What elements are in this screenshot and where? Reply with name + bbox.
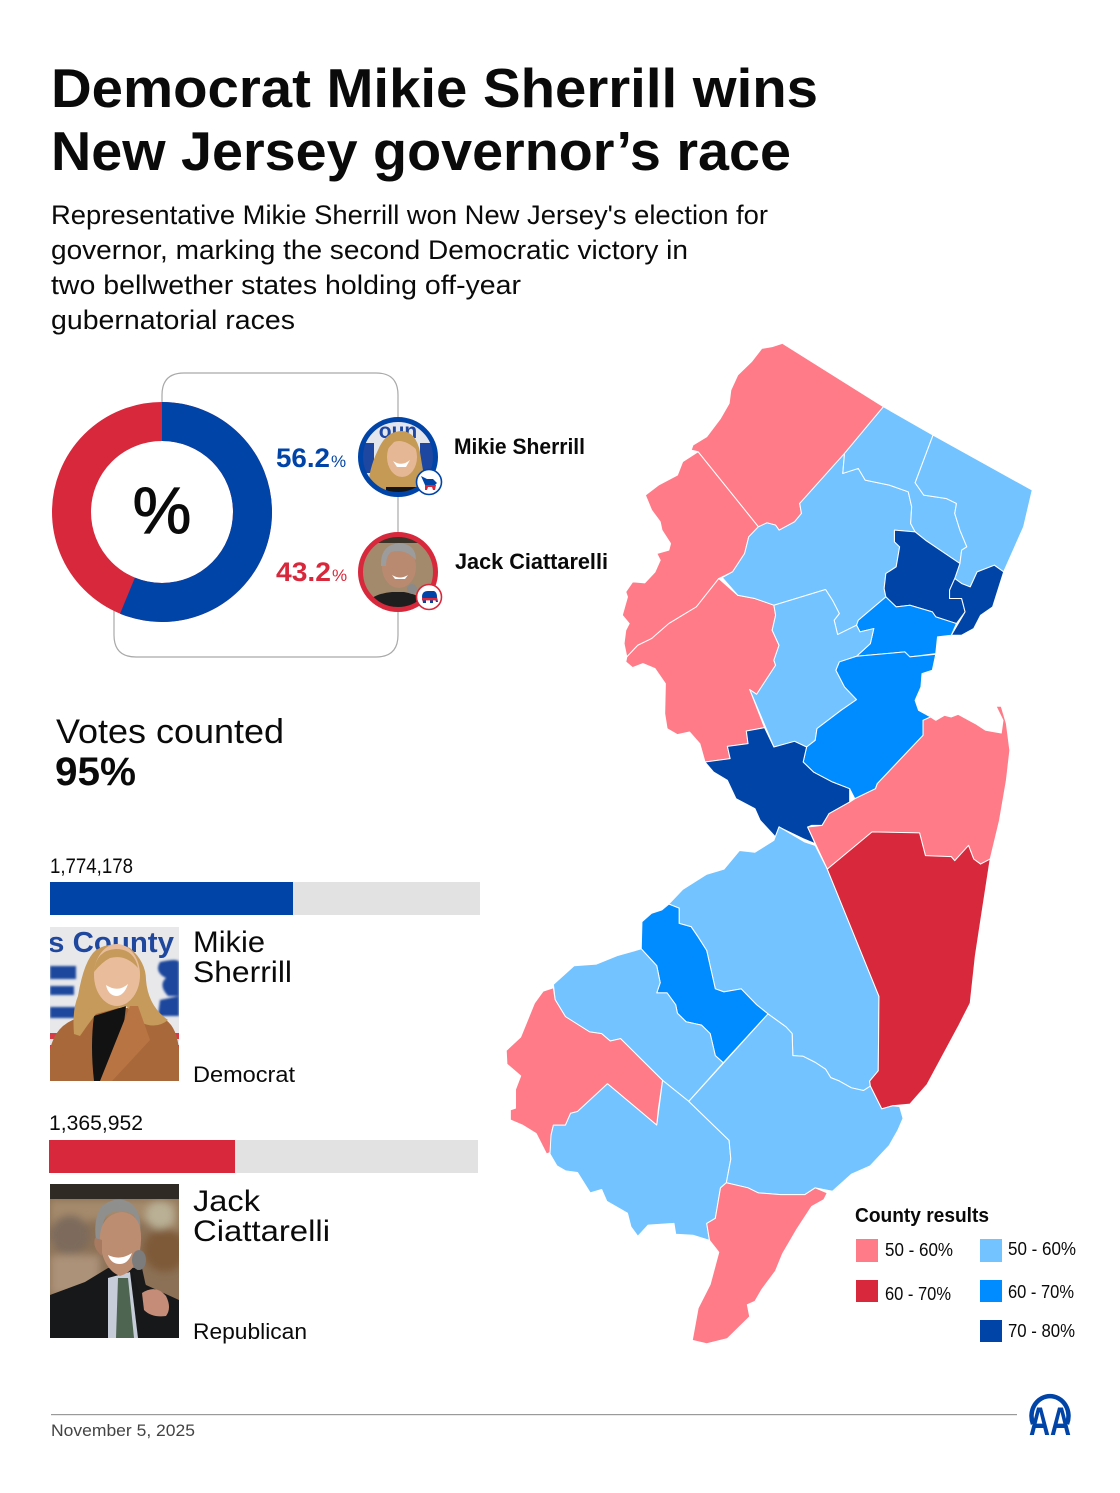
legend: county results: 60 - 70%	[885, 1284, 951, 1304]
candidate text: Mikie Sherrill, Democrat	[193, 926, 295, 1087]
candidate text: Jack Ciattarelli, Republican: Republican	[193, 1319, 307, 1344]
county: Bergen	[915, 435, 1032, 587]
Jack Ciattarelli share: 43.2	[276, 557, 331, 587]
photo: Jack Ciattarelli	[50, 1184, 187, 1338]
legend: county results: 60 - 70%	[1008, 1282, 1074, 1302]
donut chart: vote share: %	[133, 473, 191, 547]
icon: Anadolu Agency logo	[1029, 1396, 1071, 1444]
legend: county results: 50 - 60%	[885, 1240, 953, 1260]
Jack Ciattarelli share: %	[332, 566, 347, 585]
avatar: Mikie Sherrill: oun	[379, 420, 417, 443]
north and central counties	[622, 343, 1032, 869]
legend: county results: 70 - 80%	[1008, 1321, 1075, 1341]
county: Union	[857, 597, 956, 657]
county: Camden	[641, 904, 768, 1063]
map: New Jersey county results	[506, 343, 1032, 1344]
photo: Mikie Sherrill: s County	[48, 927, 174, 959]
avatar: Jack Ciattarelli	[358, 533, 442, 615]
title: Democrat Mikie Sherrill wins	[51, 57, 818, 119]
county: Gloucester	[553, 949, 723, 1101]
candidate text: Jack Ciattarelli, Republican	[193, 1185, 330, 1344]
candidate label: Jack Ciattarelli: Jack Ciattarelli	[455, 549, 608, 574]
avatar: Mikie Sherrill	[358, 418, 442, 498]
candidate text: Jack Ciattarelli, Republican: Jack	[193, 1185, 261, 1218]
panel: Mikie Sherrill vote bar: 1,774,178	[50, 855, 133, 878]
panel: Mikie Sherrill vote bar	[50, 855, 480, 915]
county: Cape May	[692, 1183, 827, 1344]
photo: Mikie Sherrill	[48, 927, 179, 1081]
county: Passaic	[843, 407, 967, 564]
county: Mercer	[705, 728, 850, 844]
county: Ocean	[827, 832, 990, 1109]
votes counted: Votes counted	[56, 713, 284, 751]
candidate text: Mikie Sherrill, Democrat: Sherrill	[193, 956, 292, 989]
subtitle text block: governor, marking the second Democratic victory in	[51, 235, 688, 265]
subtitle text block: gubernatorial races	[51, 305, 295, 335]
candidate label: Mikie Sherrill: Mikie Sherrill	[454, 434, 585, 459]
subtitle text block: two bellwether states holding off-year	[51, 270, 521, 300]
county: Cumberland	[550, 1080, 731, 1240]
footer rule	[51, 1414, 1017, 1415]
county: Warren	[622, 452, 758, 657]
panel: Jack Ciattarelli vote bar: 1,365,952	[49, 1112, 143, 1135]
legend: county results: County results	[855, 1205, 989, 1227]
votes counted	[55, 713, 284, 794]
icon: Anadolu Agency logo: AA	[1029, 1400, 1071, 1444]
county: Morris	[722, 453, 915, 635]
candidate text: Mikie Sherrill, Democrat: Mikie	[193, 926, 265, 959]
donut chart: vote share	[72, 422, 252, 602]
title: New Jersey governor’s race	[51, 120, 791, 182]
icon: Democrat donkey badge	[416, 470, 442, 494]
south counties	[506, 827, 990, 1344]
subtitle text block: Representative Mikie Sherrill won New Jersey's election for	[51, 200, 768, 230]
icon: Republican elephant badge	[416, 584, 442, 610]
Mikie Sherrill share: %	[331, 452, 346, 471]
legend: county results: 50 - 60%	[1008, 1239, 1076, 1259]
votes counted: 95%	[55, 750, 136, 794]
county: Somerset	[750, 590, 874, 747]
candidate text: Mikie Sherrill, Democrat: Democrat	[193, 1062, 295, 1087]
county: Middlesex	[803, 652, 936, 799]
county: Hudson	[950, 565, 1004, 635]
county: Burlington	[669, 827, 879, 1091]
county: Essex	[884, 530, 965, 624]
title	[51, 57, 818, 182]
county: Salem	[506, 988, 663, 1154]
county: Monmouth	[808, 706, 1010, 869]
Mikie Sherrill share: 56.2	[276, 443, 330, 473]
legend: county results	[855, 1205, 1076, 1342]
county: Atlantic	[689, 1014, 903, 1195]
subtitle text block	[51, 200, 768, 335]
connector outline around donut results	[114, 373, 398, 657]
panel: Jack Ciattarelli vote bar	[49, 1112, 478, 1173]
county: Sussex	[691, 343, 883, 530]
candidate text: Jack Ciattarelli, Republican: Ciattarelli	[193, 1215, 330, 1248]
county: Hunterdon	[626, 579, 779, 762]
date: November 5, 2025	[51, 1422, 195, 1440]
